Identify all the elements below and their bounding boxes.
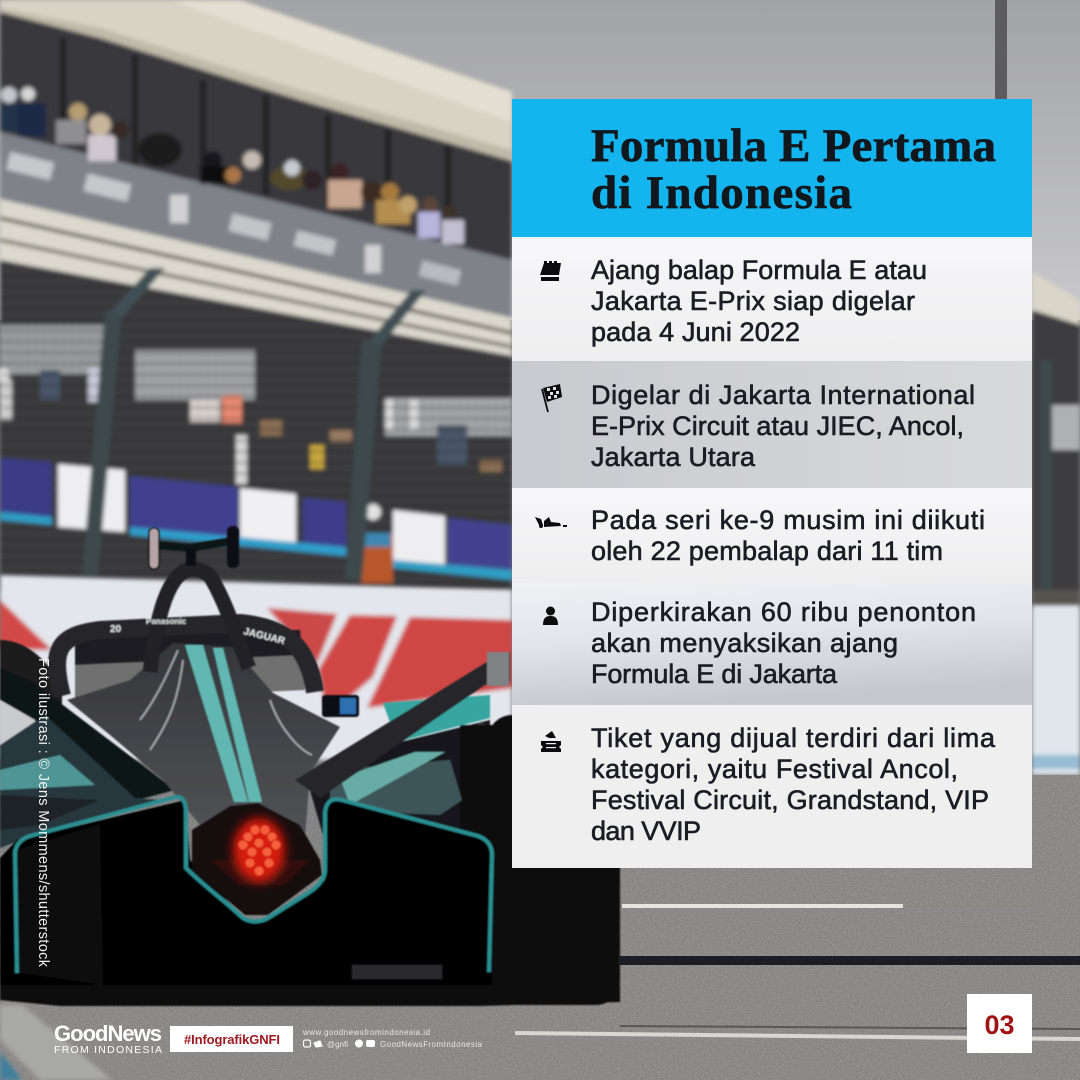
dark band on track — [620, 956, 1080, 965]
halo lettering: Panasonic — [146, 617, 187, 626]
text: tickets: Festival Circuit, Grandstand, VIP — [591, 785, 989, 815]
logo: GoodNews from Indonesia: GoodNews — [54, 1021, 162, 1046]
text: tickets — [591, 723, 996, 846]
hashtag label — [170, 1026, 293, 1052]
left grandstand — [0, 0, 512, 590]
icon: person — [543, 606, 558, 625]
text: date: Ajang balap Formula E atau — [591, 255, 927, 285]
concrete deck — [0, 199, 512, 356]
logo: GoodNews from Indonesia: FROM INDONESIA — [54, 1044, 162, 1056]
hashtag label: #InfografikGNFI — [184, 1032, 280, 1047]
text: date — [591, 255, 927, 347]
halo hoop — [75, 652, 305, 700]
spectators upper row — [0, 87, 464, 244]
row: spectators — [512, 583, 1032, 705]
text: drivers: Pada seri ke-9 musim ini diikuti — [591, 505, 985, 535]
rear wing strut left — [0, 668, 175, 802]
halo lettering: JAGUAR — [242, 626, 287, 647]
main bodywork — [67, 643, 340, 837]
text: location: E-Prix Circuit atau JIEC, Ancol, — [591, 411, 964, 441]
page number: 03 — [984, 1010, 1015, 1040]
icon: ticket — [541, 731, 561, 752]
title — [591, 120, 996, 219]
light pole — [995, 0, 1007, 99]
tail light housing — [192, 803, 322, 915]
text: tickets: dan VVIP — [591, 816, 701, 846]
text: spectators — [591, 597, 976, 689]
text: tickets: Tiket yang dijual terdiri dari lima — [591, 723, 996, 753]
text: location: Digelar di Jakarta International — [591, 380, 975, 410]
track barrier — [0, 575, 1080, 775]
social links: GoodNewsFromIndonesia — [380, 1040, 483, 1049]
rear wing strut right — [295, 652, 510, 798]
text: date: pada 4 Juni 2022 — [591, 317, 800, 347]
track line lower — [515, 1031, 1080, 1041]
text: spectators: akan menyaksikan ajang — [591, 628, 898, 658]
text: spectators: Formula E di Jakarta — [591, 659, 838, 689]
page number — [967, 994, 1032, 1053]
advertising banners — [0, 458, 52, 525]
race car — [0, 526, 620, 1006]
teal stripes — [185, 645, 248, 802]
text: tickets: kategori, yaitu Festival Ancol, — [591, 754, 958, 784]
row: drivers — [512, 488, 1032, 583]
icon: checkered flag — [542, 384, 562, 412]
camera tag — [322, 695, 359, 717]
right stand — [1032, 272, 1080, 610]
social links: @gnfi — [327, 1040, 348, 1049]
social links: www.goodnewsfromindonesia.id — [302, 1028, 430, 1037]
social links — [302, 1028, 483, 1049]
title: Formula E Pertama — [591, 120, 996, 172]
icon: race car — [535, 517, 567, 528]
text: drivers: oleh 22 pembalap dari 11 tim — [591, 536, 943, 566]
right sidepod — [383, 695, 490, 742]
row: location — [512, 361, 1032, 488]
fence posts — [82, 310, 122, 575]
panel: info card — [512, 99, 1032, 868]
teal wing outline — [15, 797, 492, 973]
text: location: Jakarta Utara — [591, 442, 756, 472]
roll hoop and mirrors — [149, 526, 249, 672]
icons: instagram twitter — [304, 1040, 322, 1047]
text: location — [591, 380, 975, 472]
road kerb bottom left — [0, 1005, 112, 1080]
other car cockpit — [0, 640, 62, 800]
lower stand — [0, 250, 512, 590]
car shadow — [0, 978, 620, 1006]
row: tickets — [512, 705, 1032, 868]
left sidepod — [0, 715, 160, 848]
tail light — [233, 818, 285, 882]
marshal — [365, 504, 381, 520]
icon: calendar — [540, 261, 561, 281]
roof canopy — [0, 0, 512, 161]
text: date: Jakarta E-Prix siap digelar — [591, 286, 915, 316]
sky — [0, 0, 1080, 320]
text: drivers — [591, 505, 985, 566]
track line upper — [622, 904, 903, 908]
halo lettering: 20 — [110, 624, 122, 635]
shadow under right bodywork — [310, 720, 490, 860]
halo lettering — [110, 617, 287, 647]
title: di Indonesia — [591, 167, 852, 219]
stand interior — [0, 12, 512, 265]
spectators lower row — [0, 368, 10, 382]
asphalt — [0, 775, 1080, 1080]
black rear diffuser — [0, 800, 492, 985]
wire mesh — [0, 262, 512, 590]
row: date — [512, 237, 1032, 361]
title band — [512, 99, 1032, 237]
right rear tyre — [488, 715, 620, 1005]
photo credit: Foto ilustrasi : © Jens Mommens/shutterstock — [35, 658, 51, 968]
balcony barrier — [0, 132, 512, 318]
icons: facebook youtube — [355, 1040, 375, 1048]
text: spectators: Diperkirakan 60 ribu penonton — [591, 597, 976, 627]
